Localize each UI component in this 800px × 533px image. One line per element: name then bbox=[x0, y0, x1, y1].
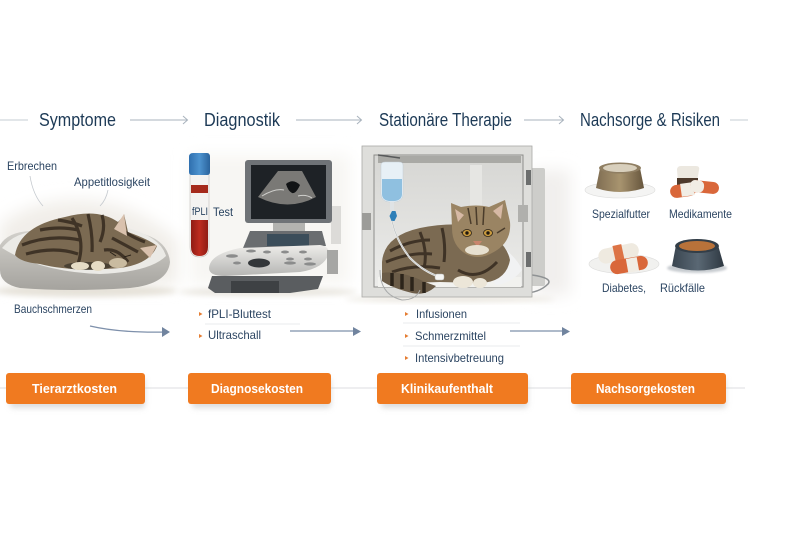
label: Rückfälle: Rückfälle bbox=[660, 281, 705, 295]
wall wash bbox=[532, 170, 570, 295]
cost box: Tierarztkosten bbox=[6, 373, 145, 408]
panel: Nachsorge und Risiken bbox=[585, 162, 732, 295]
cost box: Diagnosekosten bbox=[188, 373, 331, 408]
label: Spezialfutter: Spezialfutter bbox=[592, 207, 650, 221]
icon: tabby cat in cage bbox=[382, 200, 522, 294]
label: Diabetes: Diabetes, bbox=[602, 281, 646, 295]
heading: Symptome: Symptome bbox=[39, 110, 116, 130]
label: fPLI Test: fPLI bbox=[192, 206, 208, 218]
list: diagnostic steps: Ultraschall bbox=[208, 328, 261, 342]
cost timeline line bbox=[0, 387, 745, 389]
icon: special food bowl bbox=[585, 162, 655, 198]
arrow: Symptome to Diagnostik bbox=[130, 116, 188, 124]
cost box: Nachsorgekosten: Nachsorgekosten bbox=[596, 382, 695, 396]
icon: sleeping tabby cat bbox=[15, 213, 157, 271]
cost box: Klinikaufenthalt: Klinikaufenthalt bbox=[401, 382, 494, 396]
arrow: Symptome to Diagnostik lower bbox=[90, 326, 170, 337]
heading: Stationäre Therapie: Stationäre Therapie bbox=[379, 110, 512, 130]
arrow: Diagnostik to Therapie lower bbox=[290, 327, 361, 336]
list: therapy measures: Infusionen bbox=[416, 307, 467, 321]
control panel bbox=[243, 231, 326, 248]
label: fPLI Test: Test bbox=[213, 205, 234, 219]
arrow: Diagnostik to Therapie bbox=[296, 116, 362, 124]
base bbox=[208, 276, 323, 293]
list: diagnostic steps bbox=[199, 307, 300, 342]
icon: ultrasound machine bbox=[208, 160, 341, 293]
cost box: Klinikaufenthalt bbox=[377, 373, 528, 408]
label: Appetitlosigkeit bbox=[74, 175, 151, 206]
monitor bbox=[331, 206, 341, 244]
heading: Diagnostik: Diagnostik bbox=[204, 110, 281, 130]
arrow: Therapie to Nachsorge lower bbox=[510, 327, 570, 336]
console bbox=[209, 245, 329, 276]
heading: Nachsorge und Risiken: Nachsorge & Risiken bbox=[580, 110, 720, 130]
label: fPLI Test bbox=[192, 205, 234, 219]
icon: capsules on plate bbox=[589, 242, 659, 275]
icon: clinic cage bbox=[362, 146, 549, 297]
wall and floor wash bbox=[0, 200, 178, 285]
cost box: Diagnosekosten: Diagnosekosten bbox=[211, 382, 303, 396]
list: therapy measures: Intensivbetreuung bbox=[415, 351, 504, 365]
panel: Stationäre Therapie illustration bbox=[345, 146, 570, 365]
icon: IV drip bag and line bbox=[378, 155, 444, 300]
cost box: Tierarztkosten: Tierarztkosten bbox=[32, 382, 117, 396]
label: Appetitlosigkeit: Appetitlosigkeit bbox=[74, 175, 151, 189]
list: therapy measures bbox=[403, 307, 520, 365]
arrow: Therapie to Nachsorge bbox=[524, 116, 564, 124]
label: Erbrechen: Erbrechen bbox=[7, 159, 57, 173]
icon: dark food bowl bbox=[667, 239, 727, 273]
icon: medication capsules bbox=[669, 166, 720, 199]
wall wash bbox=[190, 155, 350, 285]
heading: Symptome bbox=[0, 110, 116, 130]
list: therapy measures: Schmerzmittel bbox=[415, 329, 486, 343]
label: Medikamente: Medikamente bbox=[669, 207, 732, 221]
panel: Diagnostik illustration bbox=[178, 153, 361, 342]
icon: blood test tube bbox=[189, 153, 234, 257]
list: diagnostic steps: fPLI-Bluttest bbox=[208, 307, 272, 321]
label: Bauchschmerzen: Bauchschmerzen bbox=[14, 302, 92, 316]
panel: Symptome illustration bbox=[0, 159, 178, 337]
ultrasound image bbox=[258, 171, 316, 204]
label: Erbrechen bbox=[7, 159, 57, 206]
cost box: Nachsorgekosten bbox=[571, 373, 726, 408]
icon: cat bed bbox=[0, 226, 177, 297]
